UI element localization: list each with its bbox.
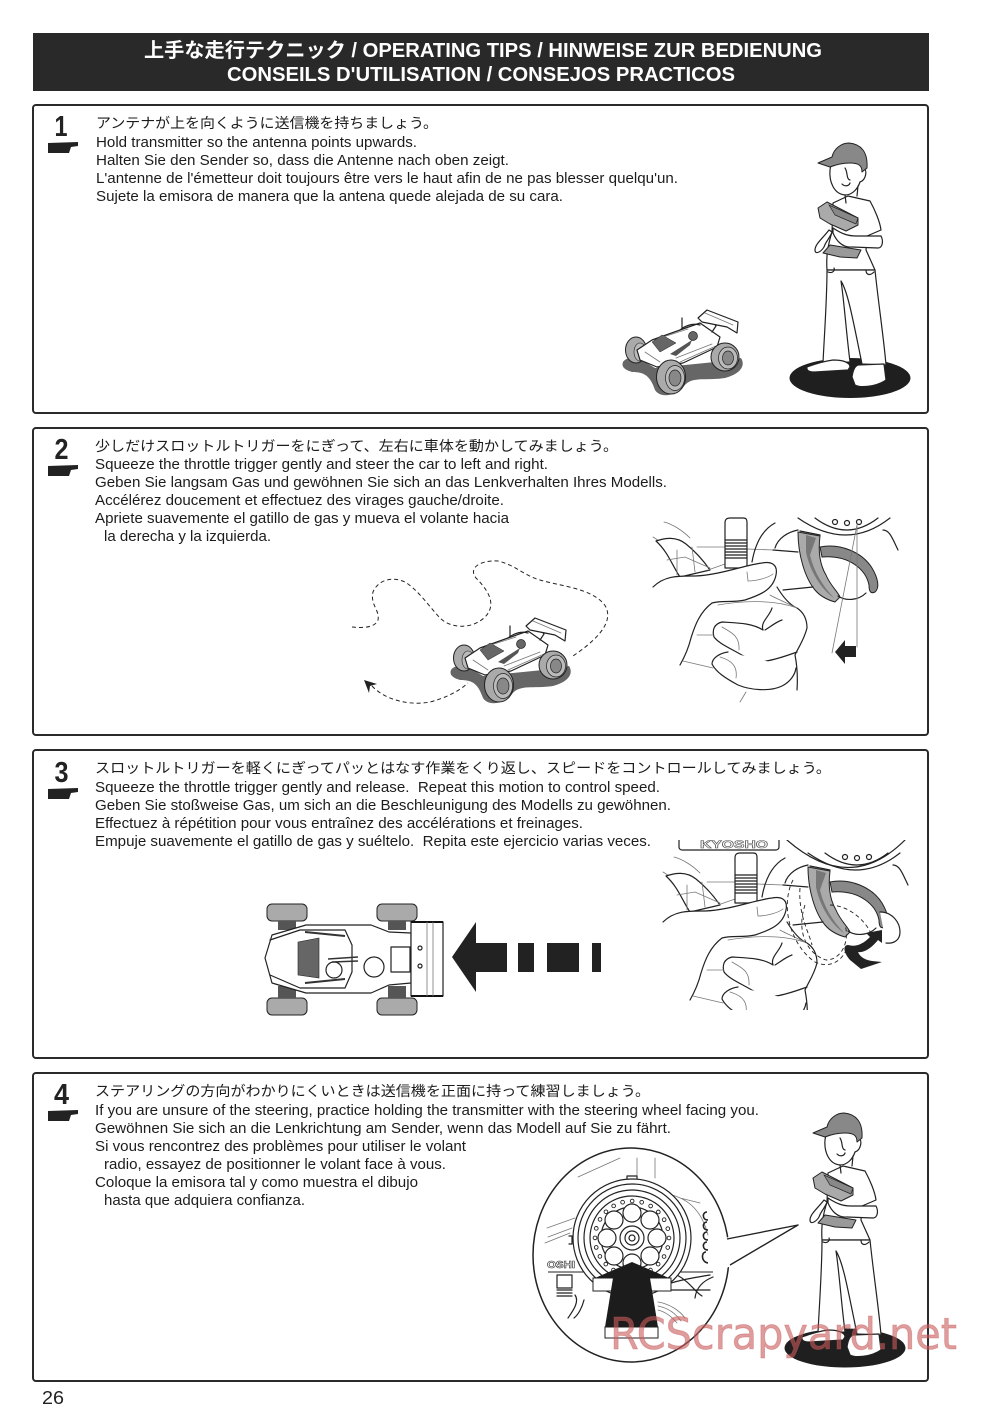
step 3 instructions [95, 760, 831, 850]
step 2 instructions: Squeeze the throttle trigger gently and steer the car to left and right. [95, 457, 548, 473]
step 4 instructions: Si vous rencontrez des problèmes pour utiliser le volant [95, 1139, 466, 1155]
step 2 instructions: 少しだけスロットルトリガーをにぎって、左右に車体を動かしてみましょう。 [95, 438, 618, 455]
step 1 instructions [96, 115, 678, 205]
title line 1: 上手な走行テクニック / OPERATING TIPS / HINWEISE ZUR BEDIENUNG [144, 39, 822, 62]
illustration: buggy with shadow [622, 310, 743, 395]
step 2 instructions: Accélérez doucement et effectuez des virages gauche/droite. [95, 493, 504, 509]
step 1 instructions: L'antenne de l'émetteur doit toujours être vers le haut afin de ne pas blesser quelqu'un. [96, 171, 678, 187]
step marker 4 [48, 1110, 78, 1121]
step number 3: 3 [54, 757, 68, 789]
step 3 instructions: Effectuez à répétition pour vous entraînez des accélérations et freinages. [95, 816, 583, 832]
step 4 instructions: radio, essayez de positionner le volant face à vous. [104, 1157, 446, 1173]
step 2 instructions: la derecha y la izquierda. [104, 529, 271, 545]
arrow: pull trigger [835, 640, 856, 664]
step number 1: 1 [54, 111, 68, 143]
pointer lines [832, 525, 857, 653]
illustration: person holding transmitter [790, 143, 910, 398]
arrow: look at wheel from front [593, 1262, 671, 1338]
step 1 instructions: Hold transmitter so the antenna points upwards. [96, 135, 417, 151]
illustration: hand pulsing throttle [662, 840, 909, 1010]
dashed driving path [352, 561, 608, 703]
step 4 instructions: Gewöhnen Sie sich an die Lenkrichtung am Sender, wenn das Modell auf Sie zu fährt. [95, 1121, 671, 1137]
step 3 instructions: Geben Sie stoßweise Gas, um sich an die Beschleunigung des Modells zu gewöhnen. [95, 798, 671, 814]
step number 2: 2 [54, 434, 68, 466]
step 3 instructions: Squeeze the throttle trigger gently and release. Repeat this motion to control speed. [95, 780, 660, 796]
step 2 instructions: Apriete suavemente el gatillo de gas y mueva el volante hacia [95, 511, 509, 527]
step 3 instructions: スロットルトリガーを軽くにぎってパッとはなす作業をくり返し、スピードをコントロールしてみましょう。 [95, 760, 831, 777]
step 4 instructions: ステアリングの方向がわかりにくいときは送信機を正面に持って練習しましょう。 [95, 1083, 650, 1100]
step 4 instructions: hasta que adquiera confianza. [104, 1193, 305, 1209]
step marker 2 [48, 465, 78, 476]
callout: transmitter wheel close-up [533, 1148, 798, 1362]
illustration: person with transmitter [784, 1113, 906, 1368]
panel: step 2 [33, 428, 928, 735]
illustration: buggy turning [450, 618, 571, 703]
panel: step 3 [33, 750, 928, 1058]
step 1 instructions: Halten Sie den Sender so, dass die Antenne nach oben zeigt. [96, 153, 509, 169]
watermark: RCScrapyard.net [610, 1309, 957, 1360]
step 2 instructions: Geben Sie langsam Gas und gewöhnen Sie sich an das Lenkverhalten Ihres Modells. [95, 475, 667, 491]
step 2 instructions [95, 438, 667, 545]
panel: step 4 [33, 1073, 957, 1408]
step 4 instructions: Coloque la emisora tal y como muestra el dibujo [95, 1175, 418, 1191]
step marker 1 [48, 142, 78, 153]
step 1 instructions: Sujete la emisora de manera que la antena quede alejada de su cara. [96, 189, 563, 205]
arrow: curved release [844, 930, 882, 969]
step 4 instructions: If you are unsure of the steering, practice holding the transmitter with the steering wheel facing you. [95, 1103, 759, 1119]
step 3 instructions: Empuje suavemente el gatillo de gas y suéltelo. Repita este ejercicio varias veces. [95, 834, 651, 850]
arrow: stop-and-go dashes [452, 922, 601, 992]
page number: 26 [42, 1388, 64, 1408]
step number 4: 4 [54, 1079, 69, 1111]
callout pointer [724, 1225, 798, 1268]
title line 2: CONSEILS D'UTILISATION / CONSEJOS PRACTICOS [227, 64, 735, 86]
step 4 instructions [95, 1083, 759, 1209]
panel: step 1 [33, 105, 928, 413]
step marker 3 [48, 788, 78, 799]
step 1 instructions: アンテナが上を向くように送信機を持ちましょう。 [96, 115, 438, 132]
illustration: buggy top view [265, 904, 443, 1015]
illustration: hand pulsing throttle: KYOSHO [700, 839, 769, 851]
callout: transmitter wheel close-up: OSHI [547, 1260, 575, 1271]
title banner [33, 33, 929, 91]
illustration: hand on throttle trigger [653, 518, 898, 702]
